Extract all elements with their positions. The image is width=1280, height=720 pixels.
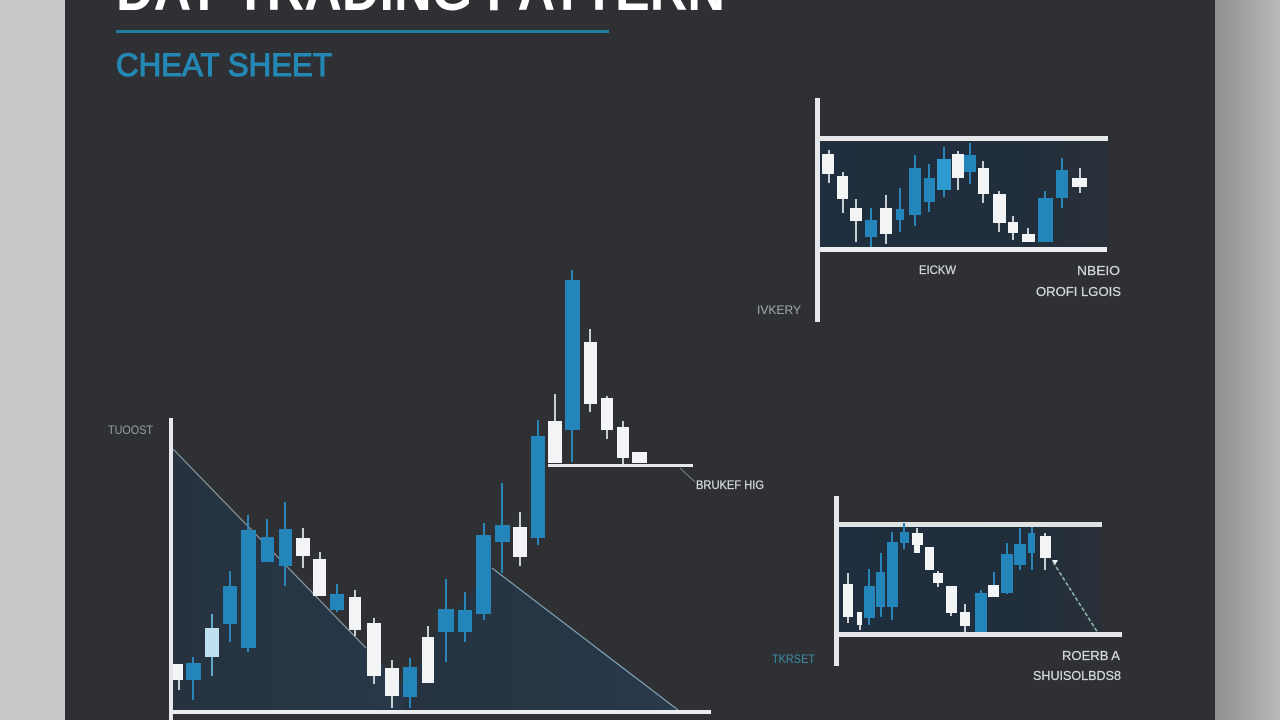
bullish candles bbox=[186, 270, 580, 708]
subtitle: CHEAT SHEET bbox=[116, 47, 332, 83]
y axis bbox=[169, 418, 173, 720]
chart: bottom right double top bbox=[772, 496, 1122, 683]
label: axis target: TUOOST bbox=[108, 423, 154, 437]
label: consolidation: BRUKEF HIG bbox=[696, 478, 764, 492]
label: axis target: TKRSET bbox=[772, 652, 816, 666]
bearish candles bbox=[173, 329, 647, 708]
trend lines bbox=[173, 449, 678, 710]
range fill bbox=[820, 142, 1108, 247]
resistance line bbox=[839, 522, 1102, 527]
bullish candles bbox=[864, 523, 1035, 632]
y axis bbox=[834, 496, 839, 666]
label: right line two: OROFI LGOIS bbox=[1036, 284, 1121, 299]
consolidation support line bbox=[548, 464, 693, 467]
title rule bbox=[116, 30, 609, 33]
label: right line one: NBEIO bbox=[1077, 263, 1120, 278]
label: right line one: ROERB A bbox=[1062, 648, 1120, 663]
label: right line two: SHUISOLBDS8 bbox=[1033, 668, 1121, 683]
baseline bbox=[173, 710, 711, 714]
bearish candles bbox=[843, 528, 1058, 632]
chart: top right range bbox=[757, 98, 1121, 322]
dashed projection line bbox=[1053, 562, 1098, 633]
y axis bbox=[815, 98, 820, 322]
support line bbox=[820, 247, 1107, 252]
bullish candles bbox=[865, 143, 1068, 247]
shaded triangle left bbox=[173, 449, 430, 711]
resistance line bbox=[820, 136, 1108, 141]
light blue candle bbox=[205, 614, 219, 676]
support line bbox=[839, 632, 1122, 637]
range fill bbox=[839, 527, 1102, 632]
shaded triangle right bbox=[400, 568, 678, 711]
leader line bbox=[680, 468, 695, 482]
label: bottom centre: EICKW bbox=[919, 263, 957, 277]
chart: main price pattern bbox=[108, 270, 764, 720]
bearish candles bbox=[822, 150, 1087, 244]
label: axis: IVKERY bbox=[757, 303, 801, 317]
